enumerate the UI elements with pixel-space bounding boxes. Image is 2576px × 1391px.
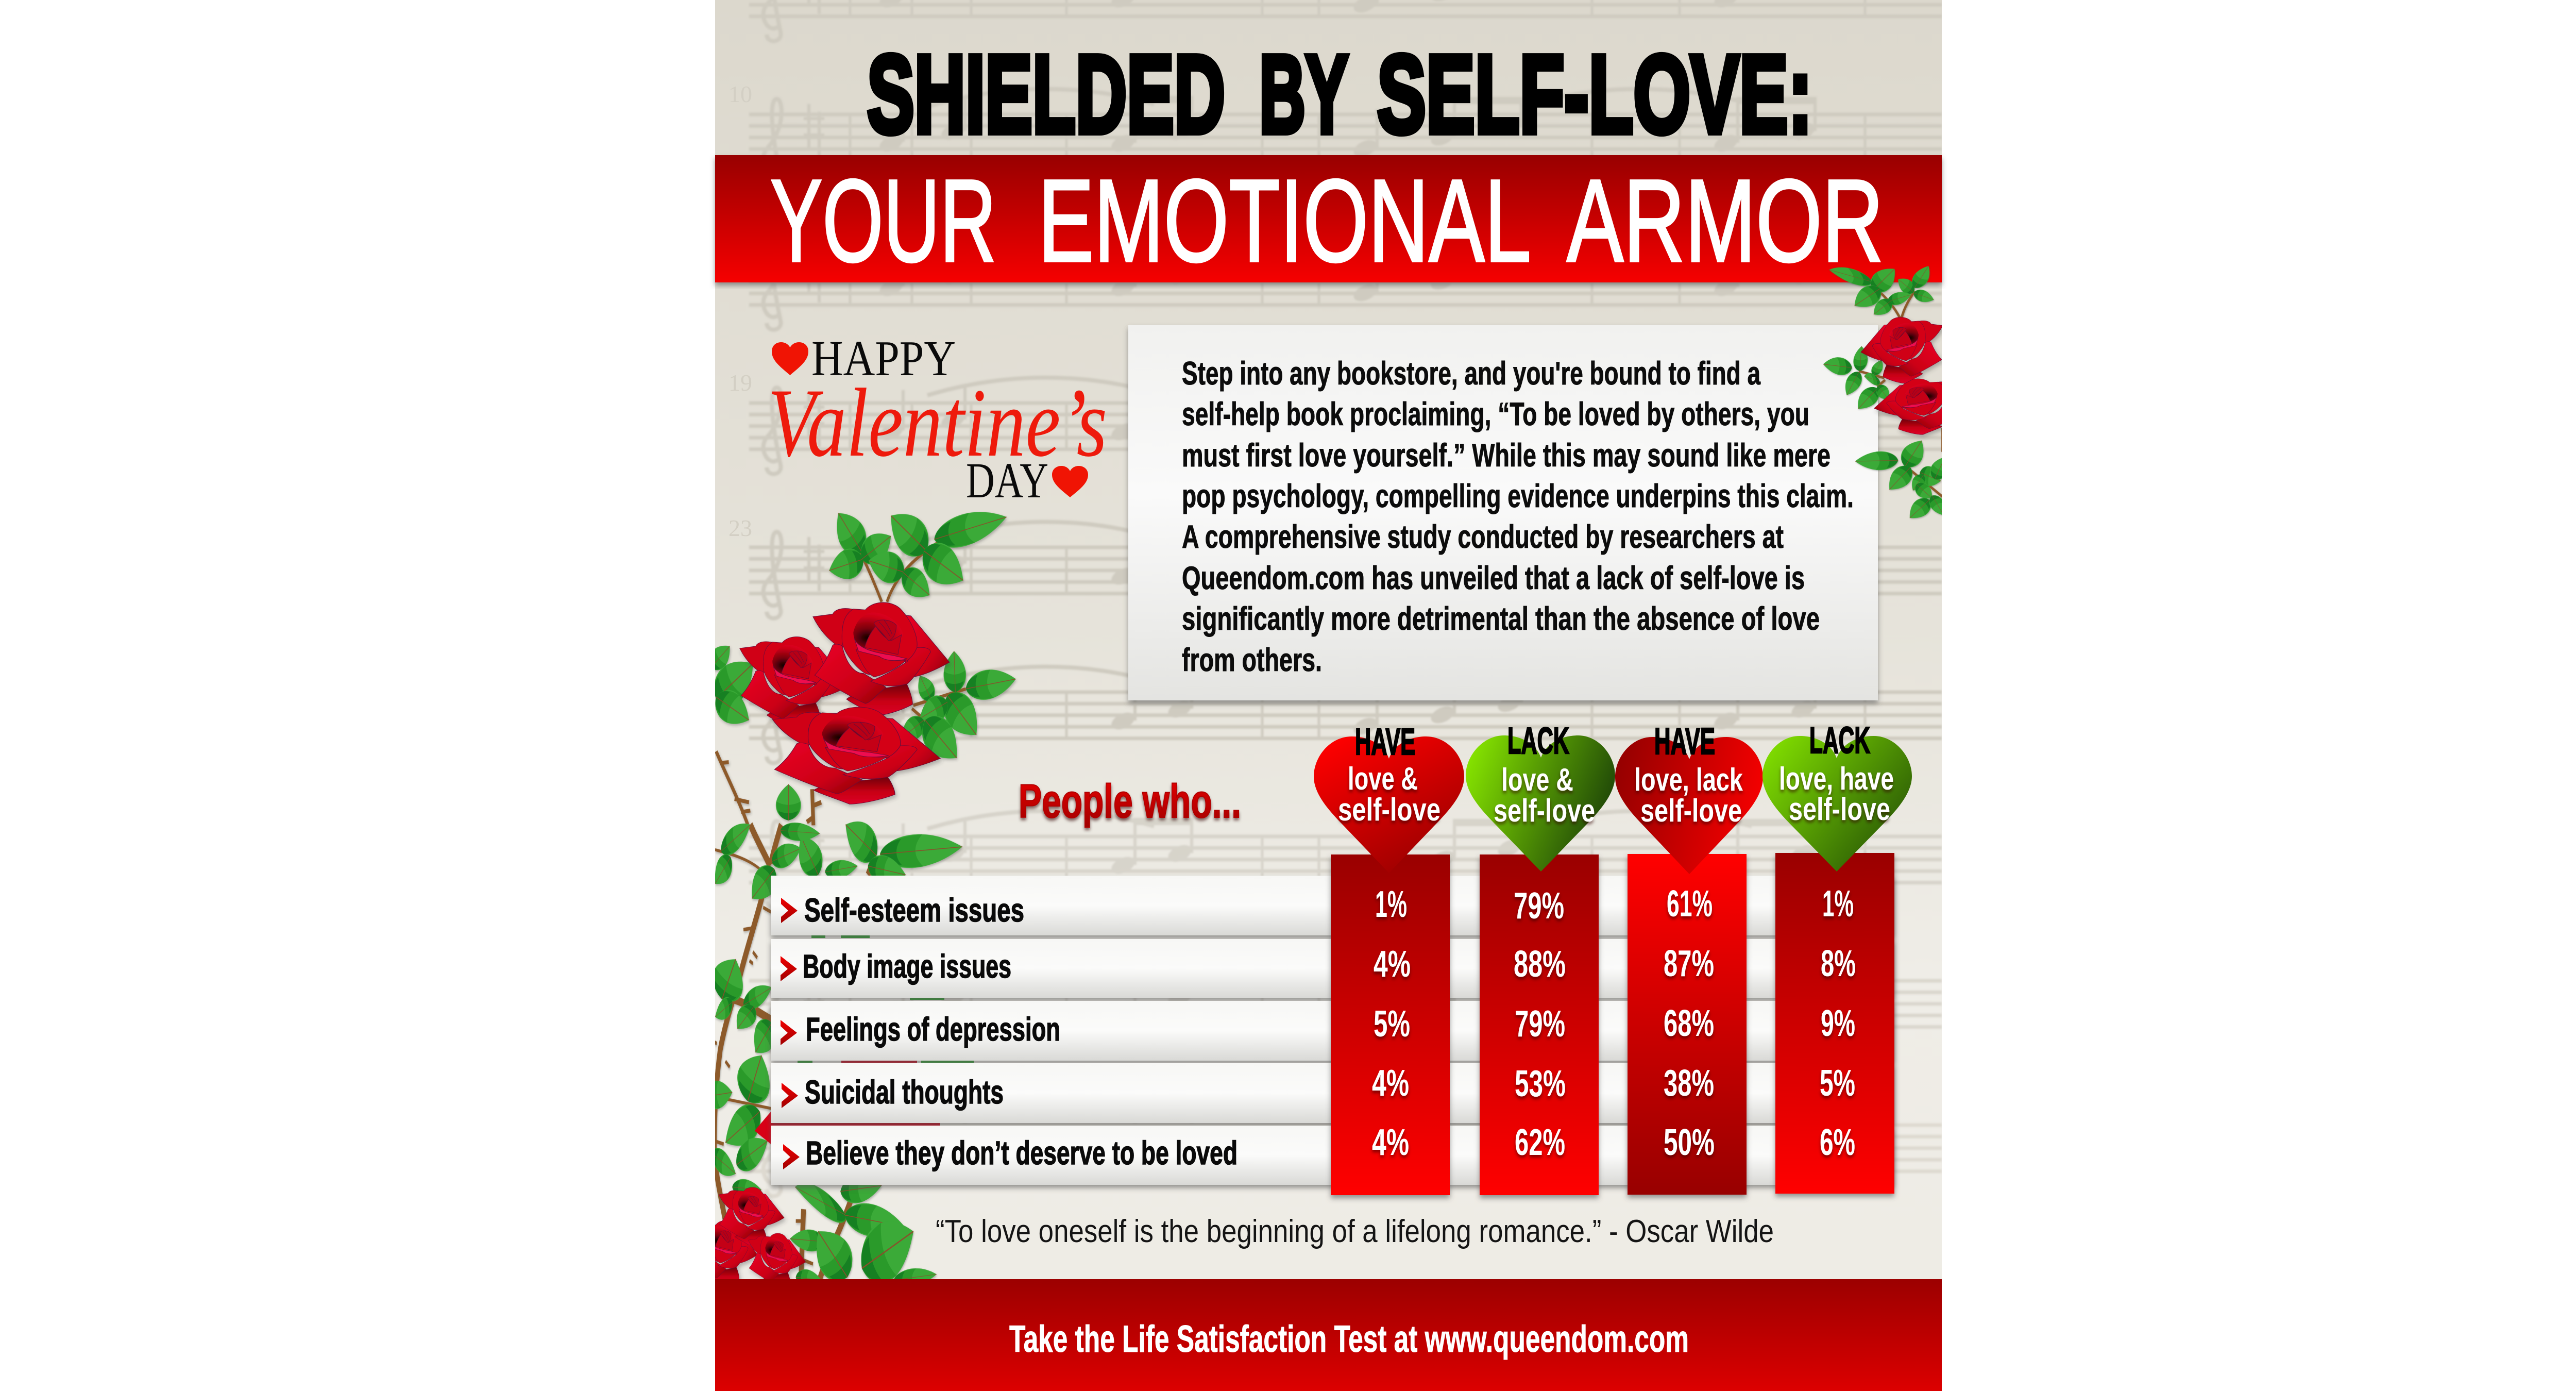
- heart: lack love, have self-love: LACK: [1809, 720, 1870, 761]
- column 4 values: 9%: [1821, 1003, 1855, 1044]
- heart: have love, lack self-love: [1615, 721, 1763, 874]
- intro paragraph: significantly more detrimental than the absence of love: [1182, 601, 1820, 637]
- red banner with subtitle: YOUR: [770, 156, 996, 287]
- column 2 values: [1514, 885, 1566, 1163]
- Happy Valentine's Day lettering: [768, 331, 1107, 508]
- column 2 values: 79%: [1514, 885, 1564, 927]
- heart: lack love and self-love: self-love: [1494, 793, 1595, 829]
- intro paragraph: self-help book proclaiming, “To be loved by others, you: [1182, 396, 1809, 432]
- intro paragraph: must first love yourself.” While this may sound like mere: [1182, 438, 1831, 474]
- icon: heart right: [1052, 466, 1088, 497]
- column 4 values: 5%: [1820, 1063, 1855, 1104]
- column 1 values: 4%: [1372, 1063, 1409, 1104]
- row: Suicidal thoughts: [782, 1074, 1004, 1111]
- red banner with subtitle: [715, 155, 1942, 287]
- footer band: Take the Life Satisfaction Test at www.queendom.com: [1009, 1318, 1689, 1360]
- row: Believe they don't deserve to be loved: [783, 1134, 1238, 1171]
- footer band: [715, 1279, 1942, 1391]
- upper leaf sprays: [705, 500, 1018, 825]
- heart: lack love, have self-love: self-love: [1789, 792, 1890, 827]
- heart: have love, lack self-love: self-love: [1640, 793, 1742, 829]
- right roses: [1861, 317, 1964, 434]
- heart: lack love, have self-love: love, have: [1779, 761, 1894, 797]
- background: sheet music panel: 10: [728, 81, 752, 107]
- row: Body image issues: [781, 948, 1011, 985]
- intro paragraph: from others.: [1182, 642, 1322, 678]
- row: Feelings of depression: Feelings of depression: [806, 1011, 1060, 1048]
- background: sheet music panel: [715, 0, 1942, 1391]
- column 2 values: 62%: [1515, 1122, 1565, 1163]
- three large roses: [740, 602, 950, 804]
- intro paragraph: Queendom.com has unveiled that a lack of self-love is: [1182, 560, 1805, 596]
- leaves around the right roses: [1823, 261, 1953, 524]
- row: Self-esteem issues: [781, 892, 1024, 929]
- title: Shielded by Self-Love: SHIELDED: [867, 32, 1225, 156]
- column 1 values: [1372, 884, 1411, 1163]
- heart: lack love and self-love: love &: [1501, 762, 1573, 798]
- column 1 values: 5%: [1374, 1003, 1410, 1045]
- row labels with chevrons: [781, 892, 1238, 1171]
- Happy Valentine's Day lettering: Valentine’s: [768, 369, 1107, 477]
- column 3 values: 87%: [1664, 943, 1714, 984]
- rose vine: top right: [1823, 261, 1964, 524]
- heart: have love, lack self-love: love, lack: [1634, 762, 1743, 798]
- heart: have love, lack self-love: HAVE: [1654, 721, 1715, 762]
- row: Body image issues: Body image issues: [803, 948, 1011, 985]
- column 3 values: [1664, 883, 1715, 1163]
- intro paragraph: pop psychology, compelling evidence underpins this claim.: [1182, 478, 1854, 514]
- title: Shielded by Self-Love: SELF-LOVE:: [1377, 32, 1812, 156]
- column 4 values: 6%: [1820, 1122, 1855, 1163]
- heart: have love and self-love: [1314, 722, 1464, 873]
- Happy Valentine's Day lettering: DAY: [966, 453, 1048, 508]
- column 2 values: 79%: [1515, 1003, 1565, 1045]
- column 4 values: [1820, 883, 1856, 1163]
- column 3 values: 38%: [1664, 1063, 1714, 1104]
- intro paragraph: Step into any bookstore, and you're bound to find a: [1182, 356, 1761, 392]
- heart: have love and self-love: HAVE: [1355, 722, 1415, 763]
- lower vine leaves and stems: [715, 822, 963, 1279]
- quote: “To love oneself is the beginning of a lifelong romance.” - Oscar Wilde: [936, 1214, 1774, 1249]
- Happy Valentine's Day lettering: HAPPY: [811, 331, 956, 386]
- column 1 values: 4%: [1374, 944, 1411, 985]
- intro paragraph: [1182, 356, 1854, 678]
- lower-left rose cluster: [715, 1187, 808, 1279]
- row: Self-esteem issues: Self-esteem issues: [804, 892, 1024, 929]
- red banner with subtitle: ARMOR: [1567, 156, 1884, 287]
- heart: have love and self-love: love &: [1348, 761, 1418, 797]
- column 3 values: 50%: [1664, 1122, 1715, 1163]
- row: Feelings of depression: [781, 1011, 1060, 1048]
- title: Shielded by Self-Love: [867, 32, 1812, 156]
- row bars: [771, 876, 1894, 1185]
- background: sheet music panel: 19: [728, 370, 752, 396]
- intro text panel: [1128, 325, 1878, 700]
- column 1 values: 1%: [1375, 884, 1407, 925]
- column 3 values: 68%: [1664, 1003, 1714, 1044]
- column 3 values: 61%: [1667, 883, 1713, 925]
- column 2 values: 88%: [1514, 944, 1566, 985]
- rose vine: left side: [715, 512, 1017, 1279]
- percentage values: [1372, 883, 1856, 1163]
- slivers visible between rows: [798, 934, 974, 1063]
- heart: lack love and self-love: [1466, 720, 1615, 872]
- heading: People who...: People who...: [1019, 775, 1241, 828]
- column 4 values: 8%: [1821, 943, 1856, 984]
- background: sheet music panel: 23: [728, 515, 752, 541]
- heart: have love and self-love: self-love: [1338, 792, 1440, 828]
- red banner with subtitle: EMOTIONAL: [1038, 156, 1531, 287]
- column 2 values: 53%: [1515, 1063, 1566, 1104]
- icon: heart left: [772, 342, 808, 375]
- column 4 values: 1%: [1822, 883, 1854, 925]
- heart: lack love and self-love: LACK: [1507, 720, 1569, 762]
- intro paragraph: A comprehensive study conducted by researchers at: [1182, 519, 1784, 555]
- row: Believe they don't deserve to be loved: Believe they don’t deserve to be loved: [806, 1134, 1238, 1171]
- column bars: [1331, 853, 1894, 1195]
- title: Shielded by Self-Love: BY: [1259, 32, 1348, 156]
- heart: lack love, have self-love: [1762, 720, 1912, 872]
- row: Suicidal thoughts: Suicidal thoughts: [805, 1074, 1004, 1111]
- column 1 values: 4%: [1372, 1122, 1409, 1163]
